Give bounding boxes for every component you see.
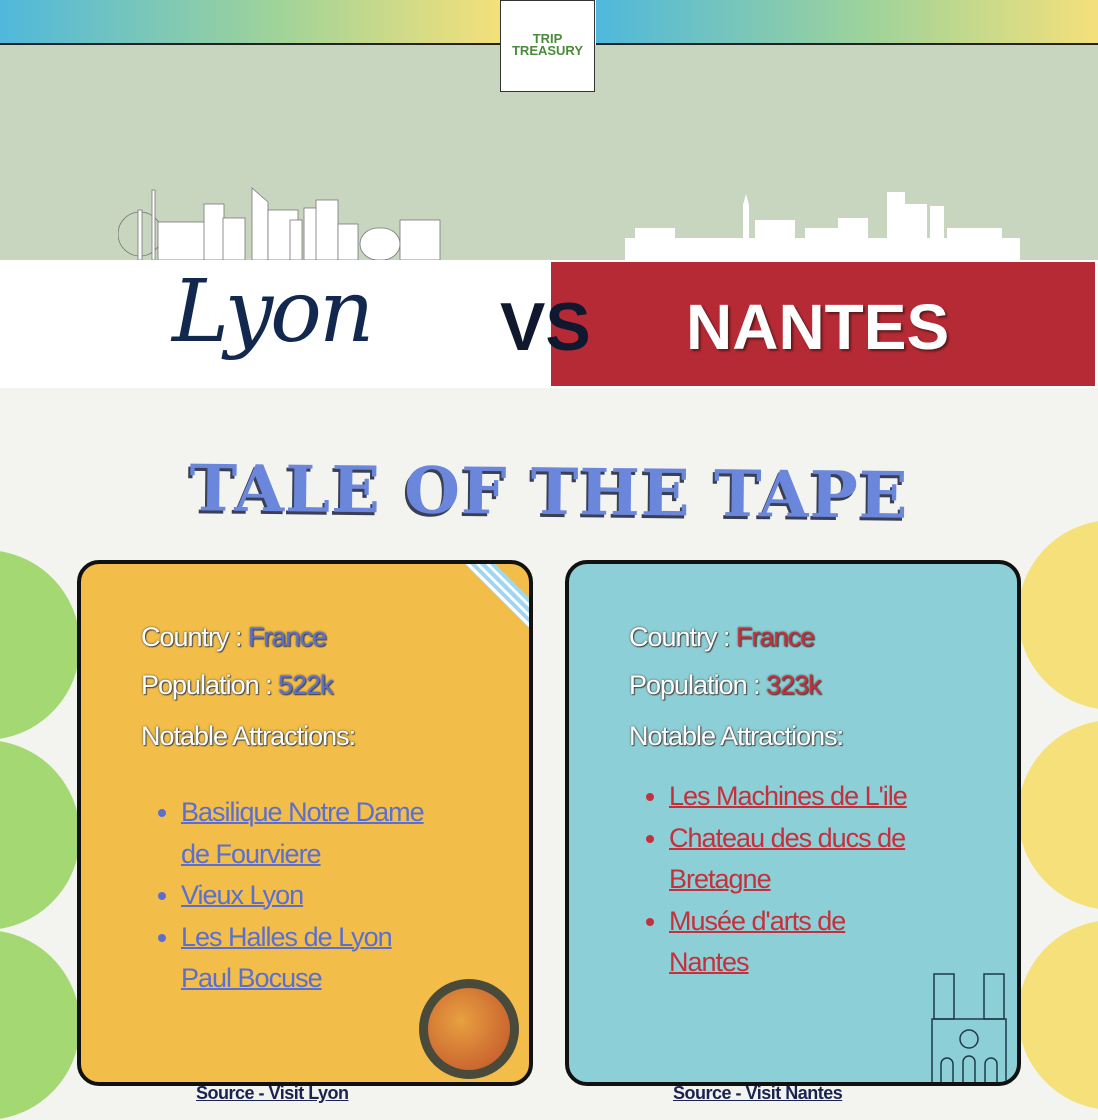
heading: tale of the tape: TALE OF THE TAPE — [189, 451, 909, 534]
panel: Nantes — [565, 560, 1021, 1086]
decorative circles right — [1021, 521, 1098, 1109]
attraction list: Les Machines de L'ile — [669, 781, 907, 811]
logo — [500, 0, 595, 92]
logo: TRIP — [533, 31, 562, 46]
Nantes title: NANTES — [686, 291, 949, 363]
skyline: Nantes — [625, 192, 1020, 260]
logo: TREASURY — [512, 43, 583, 58]
population: Population : 522k — [141, 670, 333, 700]
country: Country : France — [629, 622, 814, 652]
top banner left — [0, 0, 500, 45]
attraction list: Chateau des ducs de — [669, 822, 905, 852]
Lyon title: Lyon — [172, 262, 371, 362]
panel: Lyon — [77, 560, 533, 1086]
attraction list: Nantes — [669, 947, 749, 977]
attraction list: de Fourviere — [181, 838, 321, 868]
attraction list: Vieux Lyon — [181, 880, 303, 910]
attraction list: Musée d'arts de — [669, 906, 845, 936]
country: Country : France — [141, 622, 326, 652]
attractions label: Notable Attractions: — [629, 721, 843, 751]
green sky band — [0, 45, 1098, 260]
attraction list: Paul Bocuse — [181, 963, 322, 993]
population: Population : 323k — [629, 670, 821, 700]
top banner right — [596, 0, 1098, 45]
source: Nantes: Source - Visit Nantes — [673, 1083, 842, 1103]
attraction list — [158, 797, 424, 993]
flag ribbon — [465, 549, 587, 671]
attraction list: Les Halles de Lyon — [181, 922, 392, 952]
icon: cathedral — [931, 973, 1007, 1082]
red Nantes box — [551, 262, 1095, 386]
attraction list: Basilique Notre Dame — [181, 797, 424, 827]
attraction list: Bretagne — [669, 864, 771, 894]
skyline: Lyon — [118, 187, 440, 260]
attractions label: Notable Attractions: — [141, 721, 355, 751]
VS: VS — [500, 289, 591, 365]
source: Lyon: Source - Visit Lyon — [196, 1083, 349, 1103]
icon: stew bowl — [419, 979, 519, 1079]
decorative circles left — [0, 551, 77, 1119]
attraction list — [646, 781, 907, 977]
white name strip — [0, 260, 1098, 388]
